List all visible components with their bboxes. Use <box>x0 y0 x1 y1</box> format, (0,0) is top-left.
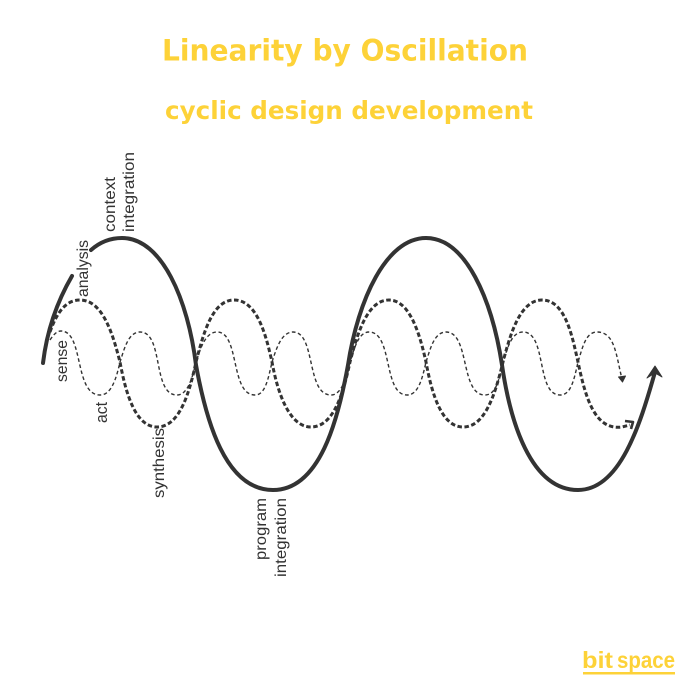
wave: small thin dashed oscillation <box>50 331 626 395</box>
logo: bit space: bit <box>582 647 613 673</box>
label: analysis: analysis <box>75 240 92 297</box>
logo: bit space <box>582 647 675 674</box>
label: context integration: integration <box>121 152 138 232</box>
title: Linearity by Oscillation <box>162 34 528 68</box>
label: program integration: program <box>253 498 270 560</box>
label: context integration: context <box>102 176 119 232</box>
label: synthesis: synthesis <box>151 428 168 498</box>
label: context integration <box>102 152 138 232</box>
label: program integration <box>253 498 290 577</box>
subtitle: cyclic design development <box>165 96 533 125</box>
wave: large solid oscillation <box>43 238 662 490</box>
label: program integration: integration <box>273 498 290 577</box>
wave: medium dashed oscillation <box>50 300 633 429</box>
logo: bit space: space <box>617 647 675 673</box>
label: act: act <box>92 402 111 423</box>
label: sense: sense <box>54 340 71 382</box>
